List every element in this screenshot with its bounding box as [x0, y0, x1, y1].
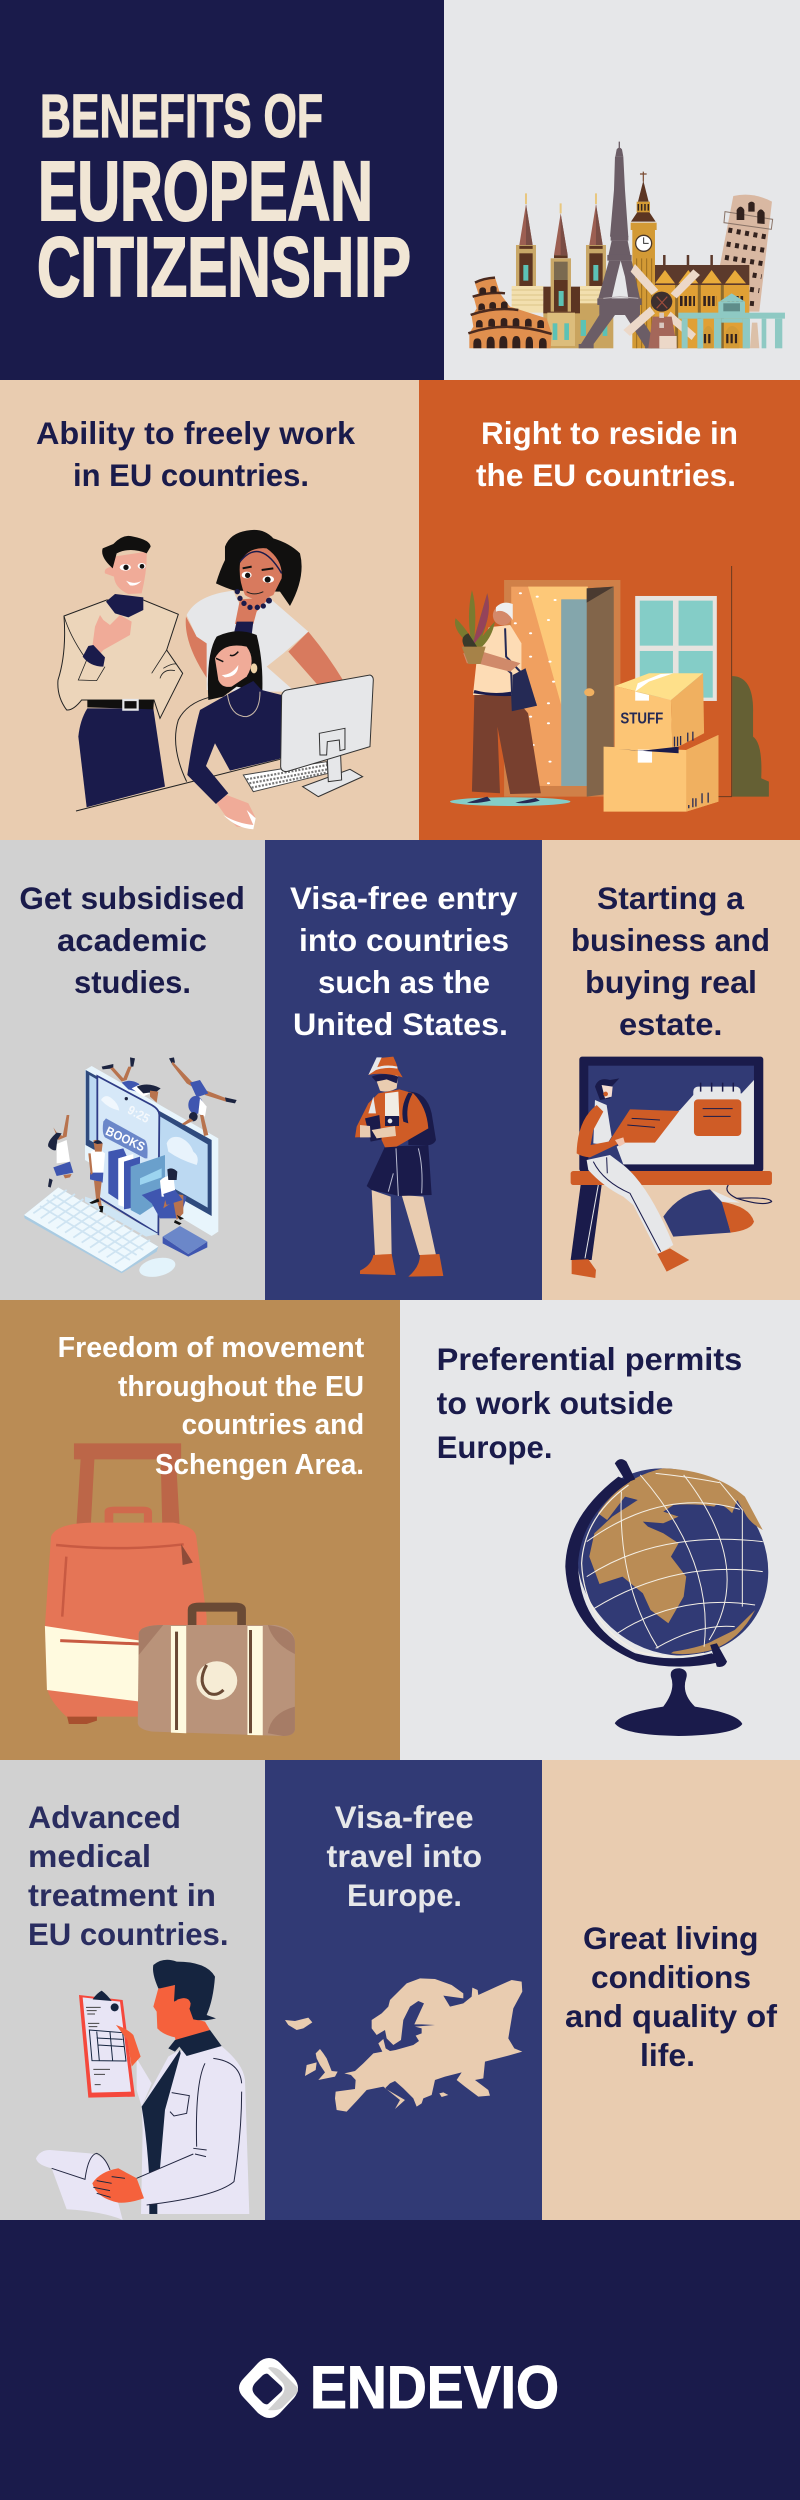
illustration: woman at a screen with calendar [571, 1057, 772, 1278]
illustration: desk globe [561, 1459, 784, 1736]
text block: great living conditions: conditions [591, 1959, 751, 1995]
panel: european landmarks [444, 0, 800, 380]
heading: business and real estate: Starting a [597, 880, 744, 916]
illustration: two suitcases [45, 1443, 295, 1736]
text block: freedom of movement: Freedom of movement [58, 1332, 365, 1364]
illustration: european landmarks skyline [468, 142, 785, 348]
heading: subsidised academic studies [19, 880, 245, 1000]
heading: right to reside [476, 415, 738, 493]
text block: freedom of movement: Schengen Area. [155, 1449, 364, 1481]
heading: ability to freely work: Ability to freely work [36, 415, 355, 451]
panel: preferential permits [400, 1300, 800, 1760]
panel: advanced medical treatment [0, 1760, 265, 2220]
text block: advanced medical treatment: Advanced [28, 1799, 181, 1835]
heading: business and real estate: buying real [585, 964, 757, 1000]
heading: preferential permits: Preferential permits [437, 1341, 742, 1377]
logo: endevio: ENDEVIO [310, 2353, 559, 2421]
heading: business and real estate: estate. [619, 1006, 722, 1042]
heading: visa-free travel: travel into [326, 1838, 482, 1874]
title: EUROPEAN [38, 144, 373, 238]
panel: visa-free travel into europe [265, 1760, 542, 2220]
title [37, 82, 411, 314]
heading: ability to freely work [36, 415, 355, 493]
illustration: woman moving house with boxes [450, 566, 769, 812]
panel: right to reside [419, 380, 800, 840]
heading: subsidised academic studies: Get subsidised [19, 880, 245, 916]
text block: advanced medical treatment: EU countries. [28, 1916, 228, 1952]
text block: freedom of movement: throughout the EU [118, 1371, 364, 1403]
heading: preferential permits: Europe. [437, 1429, 552, 1465]
heading: right to reside: the EU countries. [476, 457, 736, 493]
text block: great living conditions: Great living [583, 1920, 758, 1956]
illustration: students on a giant tablet and monitor: BOOKS [103, 1124, 147, 1154]
heading: preferential permits: to work outside [437, 1385, 673, 1421]
title: BENEFITS OF [40, 82, 323, 150]
text block: freedom of movement: countries and [182, 1409, 364, 1441]
heading: right to reside: Right to reside in [481, 415, 738, 451]
panel: subsidised academic studies [0, 840, 265, 1300]
heading: subsidised academic studies: academic [57, 922, 207, 958]
text block: great living conditions: and quality of [565, 1998, 778, 2034]
heading: visa-free travel: Visa-free [335, 1799, 474, 1835]
heading: ability to freely work: in EU countries. [73, 457, 309, 493]
illustration: students on a giant tablet and monitor [24, 1057, 237, 1280]
heading: business and real estate: business and [571, 922, 770, 958]
panel: great living conditions [542, 1760, 800, 2220]
map of europe [285, 1978, 522, 2112]
panel: freedom of movement [0, 1300, 400, 1760]
illustration: students on a giant tablet and monitor: 9:25 [125, 1103, 152, 1126]
panel: visa-free entry [265, 840, 542, 1300]
panel: business and real estate [542, 840, 800, 1300]
heading: visa-free entry [290, 880, 518, 1042]
text block: freedom of movement [58, 1332, 365, 1481]
title: CITIZENSHIP [37, 220, 411, 314]
text block: great living conditions [565, 1920, 778, 2073]
heading: visa-free entry: Visa-free entry [290, 880, 518, 916]
illustration: doctor reading a clipboard [36, 1960, 249, 2220]
text block: advanced medical treatment: medical [28, 1838, 151, 1874]
heading: visa-free entry: such as the [318, 964, 490, 1000]
illustration: three colleagues at a computer [58, 530, 373, 829]
text block: advanced medical treatment [28, 1799, 228, 1952]
heading: visa-free entry: into countries [299, 922, 509, 958]
heading: visa-free travel: Europe. [347, 1877, 462, 1913]
text block: advanced medical treatment: treatment in [28, 1877, 216, 1913]
panel: ability to freely work [0, 380, 419, 840]
footer band [0, 2220, 800, 2500]
illustration: traveller with camera and backpack [355, 1057, 443, 1277]
heading: subsidised academic studies: studies. [74, 964, 191, 1000]
heading: business and real estate [571, 880, 770, 1042]
text block: great living conditions: life. [640, 2037, 695, 2073]
heading: visa-free travel [326, 1799, 482, 1913]
panel: title header [0, 0, 444, 380]
heading: preferential permits [437, 1341, 742, 1465]
illustration: woman moving house with boxes: STUFF [620, 709, 663, 727]
heading: visa-free entry: United States. [293, 1006, 508, 1042]
